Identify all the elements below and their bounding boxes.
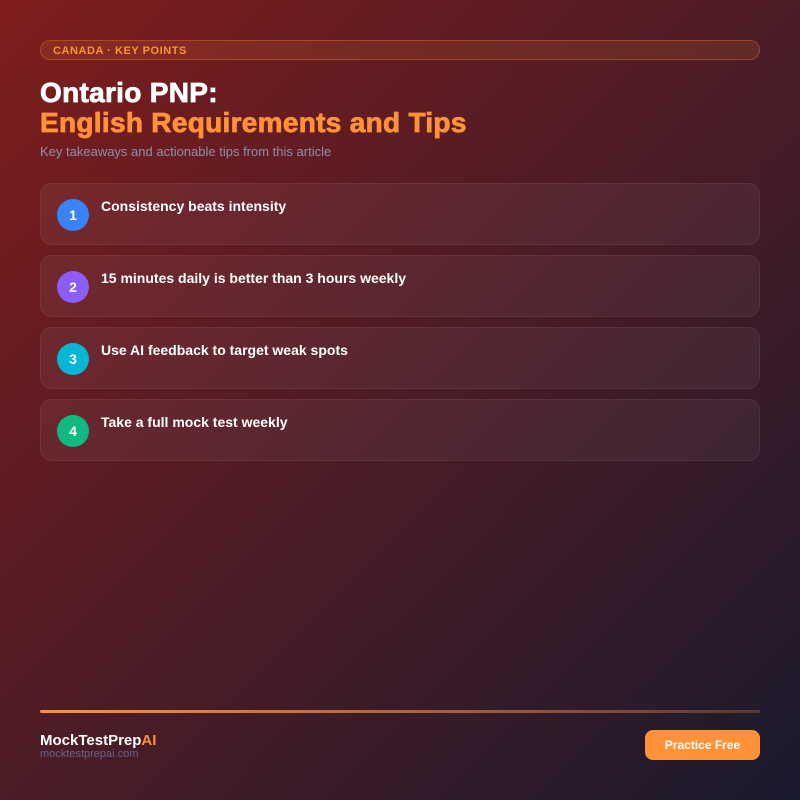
badge	[40, 40, 760, 60]
subtitle: Key takeaways and actionable tips from this article	[40, 144, 331, 159]
website url: mocktestprepai.com	[40, 748, 138, 760]
call to action button	[645, 730, 760, 760]
number badge 3	[57, 343, 89, 375]
point text 4: Take a full mock test weekly	[101, 414, 288, 430]
number badge 1: 1	[69, 207, 77, 223]
number badge 4	[57, 415, 89, 447]
footer divider bar	[40, 710, 760, 713]
number badge 2	[57, 271, 89, 303]
panel: key point 2	[40, 255, 760, 317]
panel: key point 1	[40, 183, 760, 245]
point text 3: Use AI feedback to target weak spots	[101, 342, 348, 358]
call to action button: Practice Free	[665, 738, 740, 752]
title: English Requirements and Tips	[40, 107, 467, 138]
point text 1: Consistency beats intensity	[101, 198, 286, 214]
title: Ontario PNP:	[40, 77, 218, 108]
number badge 3: 3	[69, 351, 77, 367]
number badge 1	[57, 199, 89, 231]
point text 2: 15 minutes daily is better than 3 hours weekly	[101, 270, 406, 286]
brand logo: MockTestPrepAI	[40, 732, 156, 749]
title	[40, 77, 467, 138]
number badge 2: 2	[69, 279, 77, 295]
badge: CANADA · KEY POINTS	[53, 45, 187, 57]
number badge 4: 4	[69, 423, 77, 439]
panel: key point 3	[40, 327, 760, 389]
panel: key point 4	[40, 399, 760, 461]
